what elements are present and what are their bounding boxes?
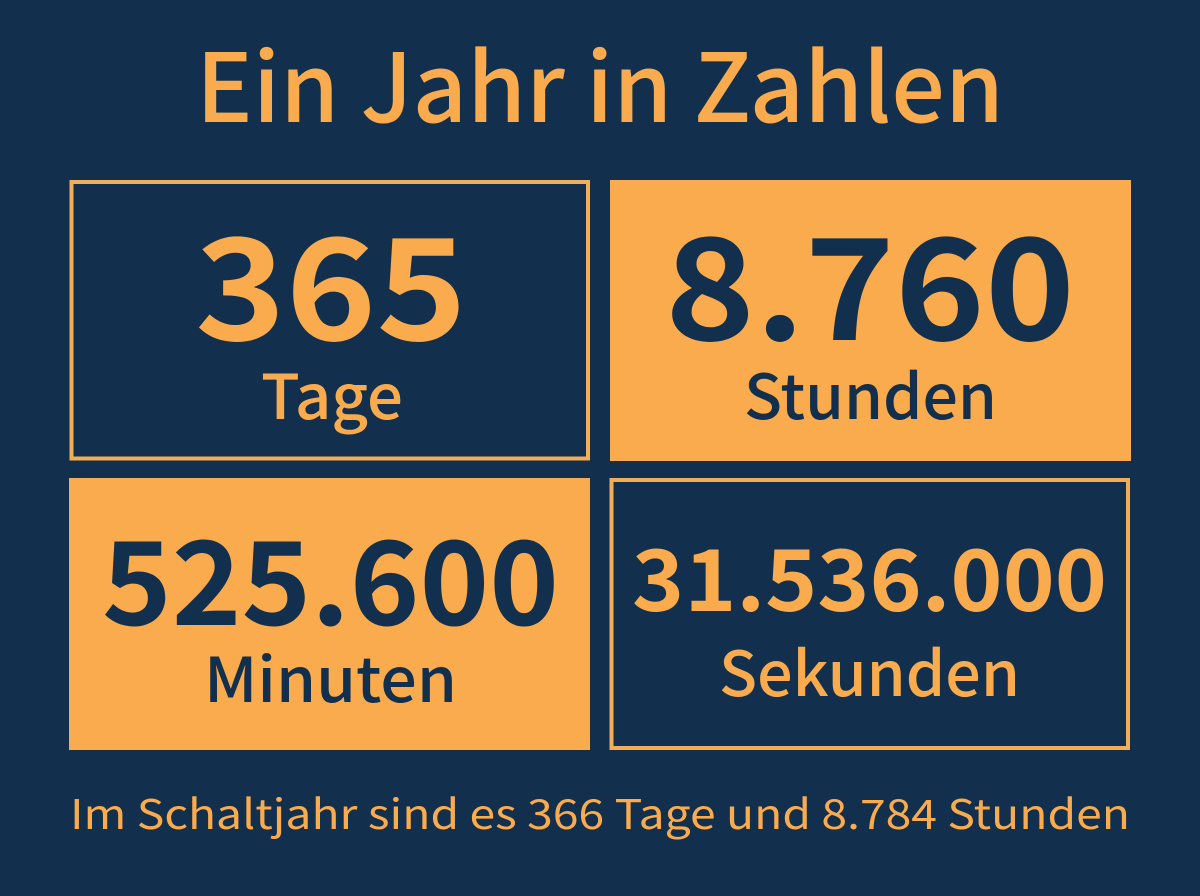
label: Stunden: Stunden bbox=[744, 347, 997, 437]
label: Sekunden: Sekunden bbox=[719, 624, 1020, 714]
title: Ein Jahr in Zahlen bbox=[196, 13, 1004, 150]
panel: Tage bbox=[72, 176, 588, 458]
number: 31.536.000: 31.536.000 bbox=[632, 513, 1107, 636]
label: Tage: Tage bbox=[261, 347, 403, 437]
number: 365: 365 bbox=[195, 176, 467, 381]
panel: Sekunden bbox=[612, 480, 1128, 748]
panel: Stunden bbox=[610, 176, 1131, 461]
footnote: Im Schaltjahr sind es 366 Tage und 8.784 Stunden bbox=[70, 781, 1130, 841]
panel: Minuten bbox=[69, 478, 590, 750]
number: 525.600: 525.600 bbox=[102, 491, 559, 659]
label: Minuten: Minuten bbox=[204, 630, 457, 720]
number: 8.760: 8.760 bbox=[665, 176, 1075, 381]
